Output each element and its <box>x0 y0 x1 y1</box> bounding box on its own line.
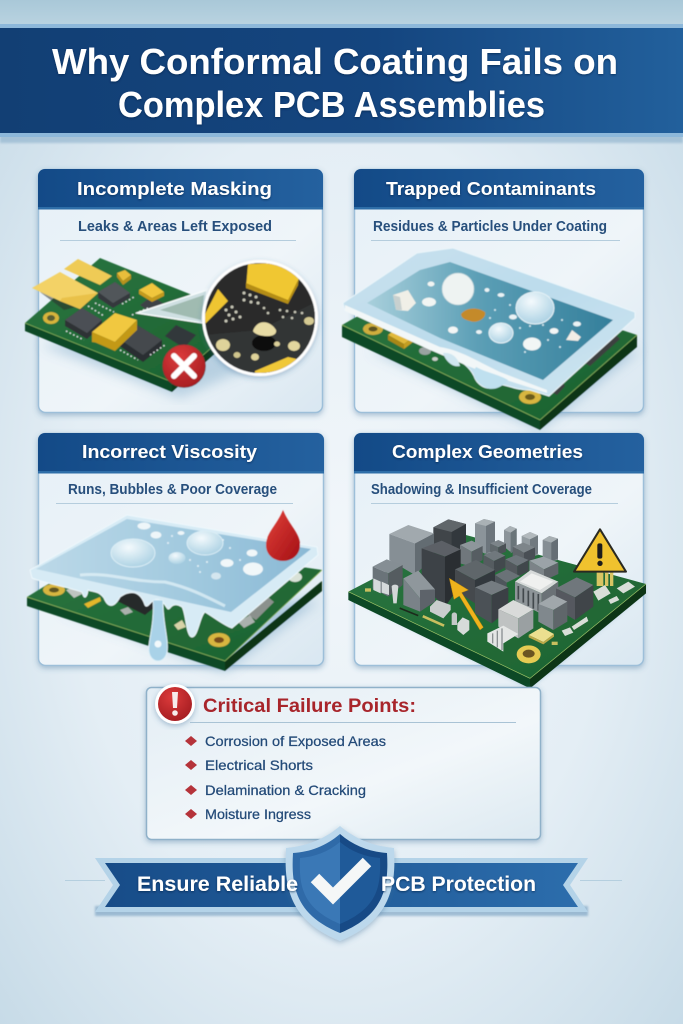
subheading: Residues & Particles Under Coating <box>373 219 607 235</box>
contaminant particles <box>393 273 581 353</box>
illustration: masked PCB <box>25 258 320 398</box>
white chip <box>515 570 558 614</box>
chips <box>98 282 130 308</box>
ribbon text: PCB Protection <box>381 873 536 896</box>
icon: red X <box>162 344 206 388</box>
magnifier circle <box>200 260 320 380</box>
gold pads <box>363 323 383 335</box>
title text <box>52 41 618 125</box>
heading: Trapped Contaminants <box>386 179 596 199</box>
board details <box>365 588 558 645</box>
zoom wedge <box>137 290 207 323</box>
gold pad <box>43 312 59 324</box>
title banner <box>0 24 683 143</box>
list item: Corrosion of Exposed Areas <box>205 733 386 749</box>
subheading: Leaks & Areas Left Exposed <box>78 219 272 235</box>
pin rows <box>66 297 165 360</box>
panel: critical failure points <box>146 684 540 840</box>
pads and parts <box>43 584 65 596</box>
yellow masking blocks <box>92 332 115 345</box>
back row boxes <box>475 519 495 555</box>
gold pad <box>517 645 541 663</box>
parts <box>388 329 413 344</box>
panel: incorrect viscosity <box>27 433 324 672</box>
heading: Incomplete Masking <box>77 179 272 199</box>
heading: Incorrect Viscosity <box>82 442 257 462</box>
title text: Why Conformal Coating Fails on <box>52 41 618 82</box>
icon: red droplet <box>266 510 300 561</box>
subheading: Runs, Bubbles & Poor Coverage <box>68 482 277 498</box>
warning legs <box>597 572 613 586</box>
list item: Electrical Shorts <box>205 757 313 773</box>
left boxes <box>373 559 403 573</box>
long drip <box>149 600 167 661</box>
ribbon text <box>137 873 536 896</box>
icon: exclamation badge <box>155 684 195 724</box>
title text: Complex PCB Assemblies <box>118 84 545 125</box>
loose tape <box>40 283 88 310</box>
list item: Delamination & Cracking <box>205 782 366 798</box>
large dark box <box>422 541 461 557</box>
heading: Complex Geometries <box>392 442 583 462</box>
subheading: Shadowing & Insufficient Coverage <box>371 482 592 498</box>
illustration: coated PCB with contaminants <box>342 248 640 430</box>
panel: incomplete masking <box>25 169 323 412</box>
icon: shield with check mark <box>286 826 394 941</box>
heading: Critical Failure Points: <box>203 696 416 717</box>
footer ribbon <box>65 858 622 916</box>
ribbon text: Ensure Reliable <box>137 873 298 896</box>
illustration: densely populated PCB <box>348 519 646 688</box>
panel: trapped contaminants <box>342 169 644 430</box>
illustration: coating runs on PCB <box>27 510 322 672</box>
bubbles <box>111 522 263 580</box>
yellow arrow <box>449 578 483 630</box>
panel: complex geometries <box>348 433 646 688</box>
coating sheet <box>343 248 635 396</box>
coating sheet with drips <box>30 515 318 637</box>
icon: warning triangle <box>574 529 626 572</box>
list item: Moisture Ingress <box>205 806 311 822</box>
comb connector <box>487 626 518 652</box>
